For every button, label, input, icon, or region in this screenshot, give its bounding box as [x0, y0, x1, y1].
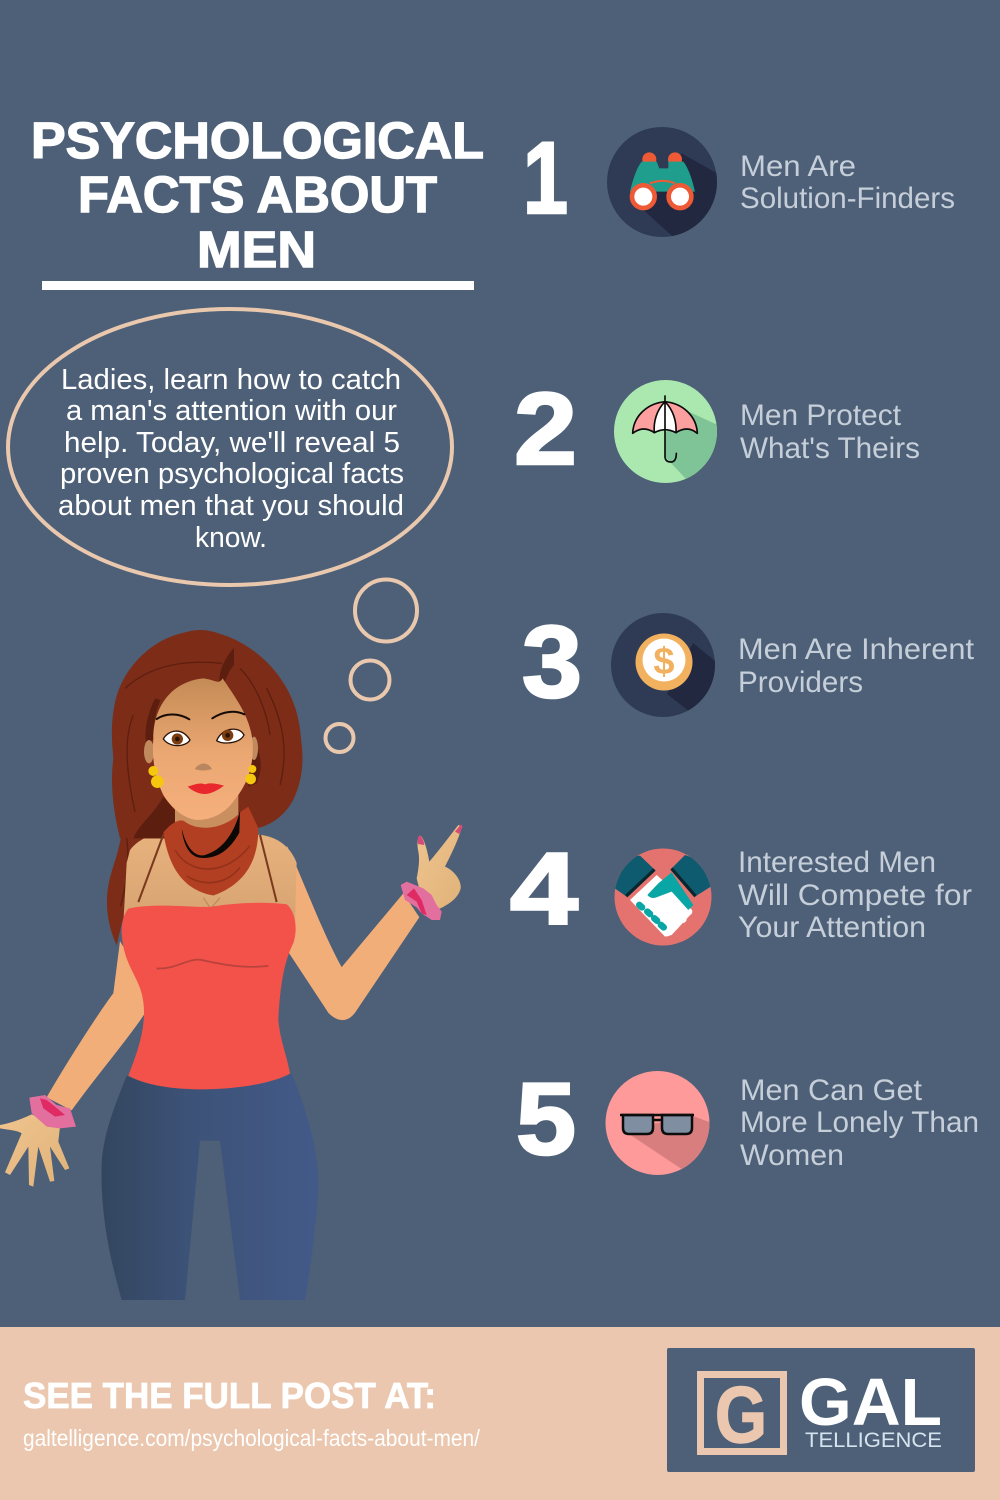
number 1: 1 [523, 121, 568, 235]
label 3 [738, 633, 975, 699]
item 2 [516, 380, 919, 483]
speech bubble with intro text: Ladies, learn how to catch [61, 364, 401, 396]
label 4: Interested Men [738, 846, 936, 879]
hair shadows [133, 648, 261, 838]
palm and fingers [0, 1114, 69, 1187]
left scrunchie [29, 1095, 76, 1128]
lips [188, 783, 224, 794]
earrings [148, 765, 256, 788]
label 4: Your Attention [738, 911, 926, 944]
item 5 [516, 1062, 979, 1176]
speech bubble with intro text: proven psychological facts [60, 458, 404, 490]
number 4: 4 [510, 832, 578, 946]
right arm [287, 846, 419, 1020]
nails [418, 824, 463, 845]
left arm [47, 941, 147, 1110]
label 1 [740, 150, 955, 215]
label 5: Women [740, 1139, 844, 1172]
thought bubbles [326, 580, 417, 752]
title: MEN [197, 221, 316, 278]
ears [144, 737, 258, 763]
left hand [0, 1095, 76, 1187]
neck [175, 792, 238, 838]
number 3: 3 [522, 605, 582, 719]
icon: coin [611, 613, 720, 720]
left eye [163, 731, 190, 746]
red top [122, 903, 296, 1089]
icon: handshake [610, 848, 713, 946]
necklace [203, 898, 220, 924]
label 2: What's Theirs [740, 432, 920, 465]
nose [195, 763, 212, 770]
label 3: Men Are Inherent [738, 633, 975, 666]
logo: GAL [799, 1365, 942, 1440]
hair strands [125, 662, 284, 812]
body [47, 631, 419, 1300]
item 3 [522, 605, 975, 720]
clothing and hands [122, 807, 296, 1089]
title: FACTS ABOUT [78, 166, 437, 223]
right eye [217, 729, 244, 743]
long hair [107, 631, 301, 945]
icon: coin: $ [653, 641, 675, 683]
title [31, 112, 484, 278]
palm and fingers [417, 825, 462, 910]
speech bubble with intro text [8, 309, 452, 585]
hair strand [121, 824, 128, 906]
icon: sunglasses [606, 1071, 712, 1175]
item 4 [510, 848, 972, 946]
face [153, 678, 253, 820]
footer band [0, 1327, 1000, 1500]
top straps [138, 835, 277, 902]
label 5 [740, 1074, 979, 1172]
top crease [157, 960, 268, 969]
illustration: woman pointing [0, 630, 463, 1300]
icon: binoculars [607, 127, 720, 240]
right hand [401, 824, 463, 920]
logo: G [715, 1370, 767, 1459]
footer url: galtelligence.com/psychological-facts-about-men/ [23, 1425, 481, 1451]
label 1: Solution-Finders [740, 182, 955, 215]
label 2 [740, 399, 920, 465]
hair on head [112, 630, 302, 838]
logo [667, 1348, 975, 1472]
label 4: Will Compete for [738, 879, 972, 912]
label 1: Men Are [740, 150, 856, 183]
logo: TELLIGENCE [805, 1429, 942, 1452]
label 2: Men Protect [740, 399, 902, 432]
chest [123, 833, 297, 924]
speech bubble with intro text: help. Today, we'll reveal 5 [64, 427, 400, 459]
label 3: Providers [738, 666, 863, 699]
title underline [42, 281, 474, 290]
item 1 [523, 121, 955, 240]
eyebrows [157, 712, 244, 719]
speech bubble with intro text: know. [195, 522, 267, 554]
speech bubble with intro text: a man's attention with our [66, 395, 397, 427]
head [112, 630, 302, 838]
footer call to action: SEE THE FULL POST AT: [23, 1375, 436, 1416]
label 5: More Lonely Than [740, 1106, 979, 1139]
scarf [163, 807, 258, 896]
icon: umbrella [614, 380, 720, 487]
number 2: 2 [514, 372, 577, 486]
speech bubble with intro text: about men that you should [58, 490, 404, 522]
title: PSYCHOLOGICAL [31, 112, 484, 169]
right scrunchie [401, 882, 442, 920]
number 5: 5 [516, 1062, 576, 1176]
label 4 [738, 846, 972, 944]
pants [101, 1073, 318, 1300]
label 5: Men Can Get [740, 1074, 923, 1107]
